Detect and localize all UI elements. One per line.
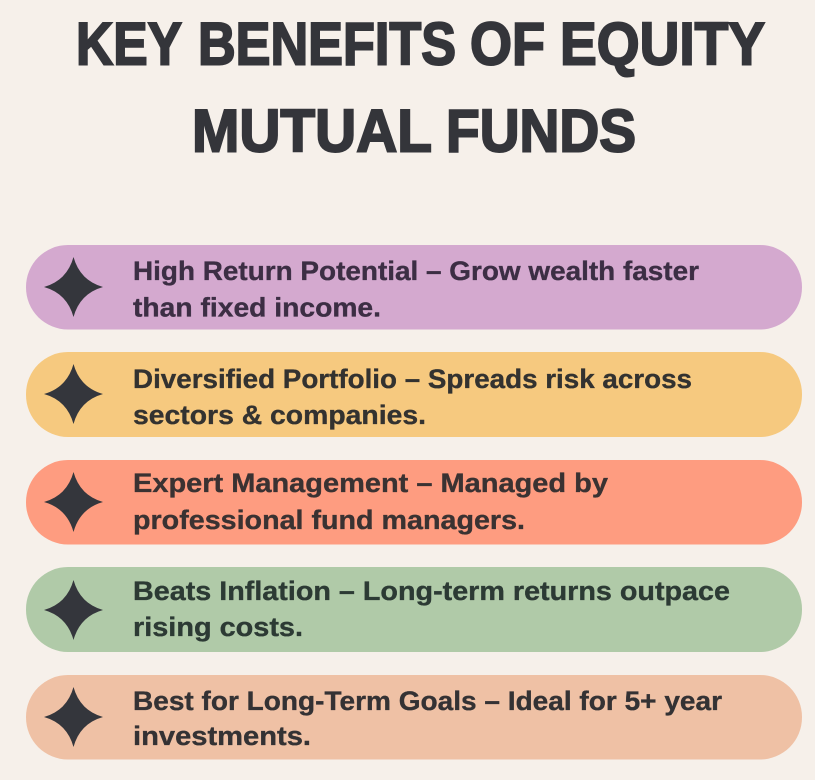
title: KEY bbox=[76, 10, 182, 78]
title: BENEFITS bbox=[198, 10, 456, 78]
title: OF bbox=[470, 10, 545, 78]
panel: high return potential bbox=[26, 245, 802, 330]
icon: four-point star bbox=[44, 687, 103, 747]
panel: best for long-term goals: investments. bbox=[133, 721, 311, 751]
title: FUNDS bbox=[446, 98, 636, 164]
panel: high return potential: than fixed income. bbox=[133, 292, 381, 322]
panel: beats inflation bbox=[26, 567, 802, 652]
title bbox=[76, 10, 765, 164]
panel: expert management: Expert Management – Managed by bbox=[133, 468, 608, 498]
panel: diversified portfolio: Diversified Portfolio – Spreads risk across bbox=[133, 364, 692, 394]
icon: four-point star bbox=[44, 472, 103, 532]
icon: four-point star bbox=[44, 364, 103, 424]
panel: beats inflation: Beats Inflation – Long-term returns outpace bbox=[133, 576, 730, 606]
panel: high return potential: High Return Potential – Grow wealth faster bbox=[133, 256, 699, 286]
title: MUTUAL bbox=[192, 98, 432, 164]
panel: expert management bbox=[26, 460, 802, 544]
icon: four-point star bbox=[44, 580, 103, 640]
title: EQUITY bbox=[560, 10, 765, 78]
panel: expert management: professional fund managers. bbox=[133, 505, 525, 535]
panel: beats inflation: rising costs. bbox=[133, 612, 303, 642]
panel: best for long-term goals: Best for Long-Term Goals – Ideal for 5+ year bbox=[133, 686, 722, 716]
icon: four-point star bbox=[44, 257, 103, 317]
panel: best for long-term goals bbox=[26, 675, 802, 760]
panel: diversified portfolio: sectors & companies. bbox=[133, 400, 426, 430]
panel: diversified portfolio bbox=[26, 352, 802, 437]
